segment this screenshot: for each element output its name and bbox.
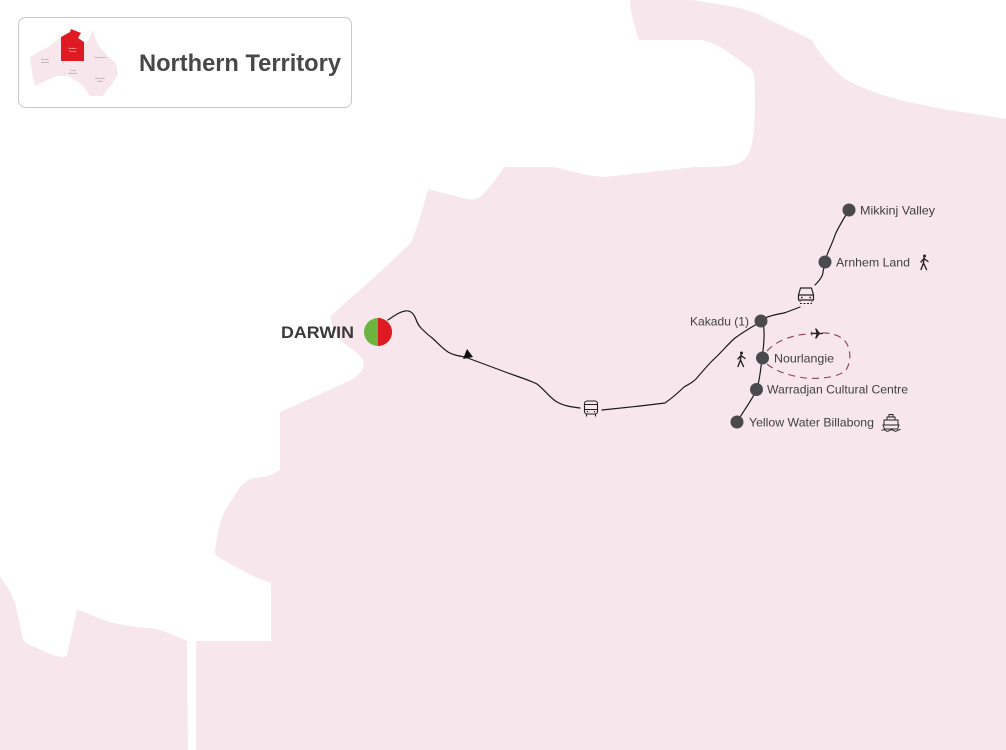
- stop: Kakadu (1): Kakadu (1): [690, 314, 749, 328]
- icon: boat: [882, 414, 900, 431]
- route line: Kakadu to Yellow Water Billabong: [737, 322, 764, 422]
- stop: Yellow Water Billabong: Yellow Water Billabong: [749, 416, 874, 430]
- route line: Darwin to Kakadu with bus stop gap: [388, 311, 757, 410]
- icon: hiker near Nourlangie: [738, 352, 745, 366]
- stop: Arnhem Land: Arnhem Land: [836, 256, 910, 270]
- mini map: Australia locator: Western: [41, 58, 49, 61]
- mini map: Australia locator: South: [70, 69, 76, 72]
- mini map: Australia locator: [30, 29, 118, 96]
- mini map: Australia locator: Northern: [69, 47, 76, 50]
- stop: Warradjan Cultural Centre: Warradjan Cultural Centre: [767, 382, 908, 396]
- mini map: Australia locator: Wales: [97, 81, 103, 83]
- mini map: Australia locator: Australia: [41, 61, 50, 64]
- header panel: region title card: [18, 18, 352, 108]
- icon: bus: [584, 401, 598, 416]
- arrowhead: direction of travel: [463, 349, 473, 359]
- dashed flight loop around Nourlangie: [767, 333, 850, 378]
- mini map: Australia locator: New South: [95, 77, 105, 80]
- mini map: Australia locator: Territory: [69, 50, 76, 53]
- marker: Darwin start/end: [364, 318, 392, 346]
- heading: Northern Territory: Northern Territory: [139, 50, 342, 77]
- stop: Mikkinj Valley: Mikkinj Valley: [860, 204, 935, 218]
- icon: car: [798, 288, 814, 304]
- stop: Nourlangie: Nourlangie: [774, 352, 834, 366]
- icon: plane: [811, 328, 823, 338]
- route line: Kakadu to Arnhem Land and Mikkinj Valley: [765, 210, 849, 318]
- icon: hiker near Arnhem Land: [921, 254, 928, 270]
- map: south-west landmass: [0, 577, 188, 750]
- label: Darwin: DARWIN: [281, 323, 354, 342]
- mini map: Australia locator: Queensland: [95, 57, 105, 59]
- mini map: Australia locator: Australia: [69, 72, 78, 75]
